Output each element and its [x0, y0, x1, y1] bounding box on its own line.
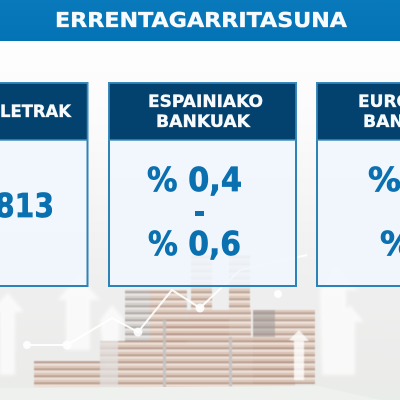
back coin stacks	[125, 255, 315, 384]
background photo: coins, arrows and growth line	[0, 255, 380, 400]
panel body	[109, 83, 296, 286]
range dash	[195, 211, 204, 216]
foreground arrow	[289, 330, 309, 380]
panel header	[0, 83, 88, 140]
value: upper rate: % 0,6	[148, 224, 241, 263]
growth line dots	[23, 290, 282, 350]
value: lower rate: % 0,4	[147, 160, 242, 199]
front coin stacks	[34, 320, 295, 388]
panel heading: LETRAK	[0, 102, 72, 121]
title banner	[0, 0, 400, 41]
panel: Spanish banks	[109, 83, 296, 286]
title: ERRENTAGARRITASUNA	[55, 8, 347, 32]
table surface	[0, 386, 380, 400]
panel body	[317, 83, 400, 286]
background arrows	[0, 264, 364, 375]
panel body	[0, 83, 88, 286]
panel header	[109, 83, 296, 140]
panel header	[317, 83, 400, 140]
panel: European banks	[317, 83, 400, 286]
growth line	[25, 255, 307, 345]
panel: Spanish banks: BANKUAK	[156, 112, 251, 131]
panel: left (letters)	[0, 83, 88, 286]
panel heading: ESPAINIAKO	[148, 92, 263, 111]
